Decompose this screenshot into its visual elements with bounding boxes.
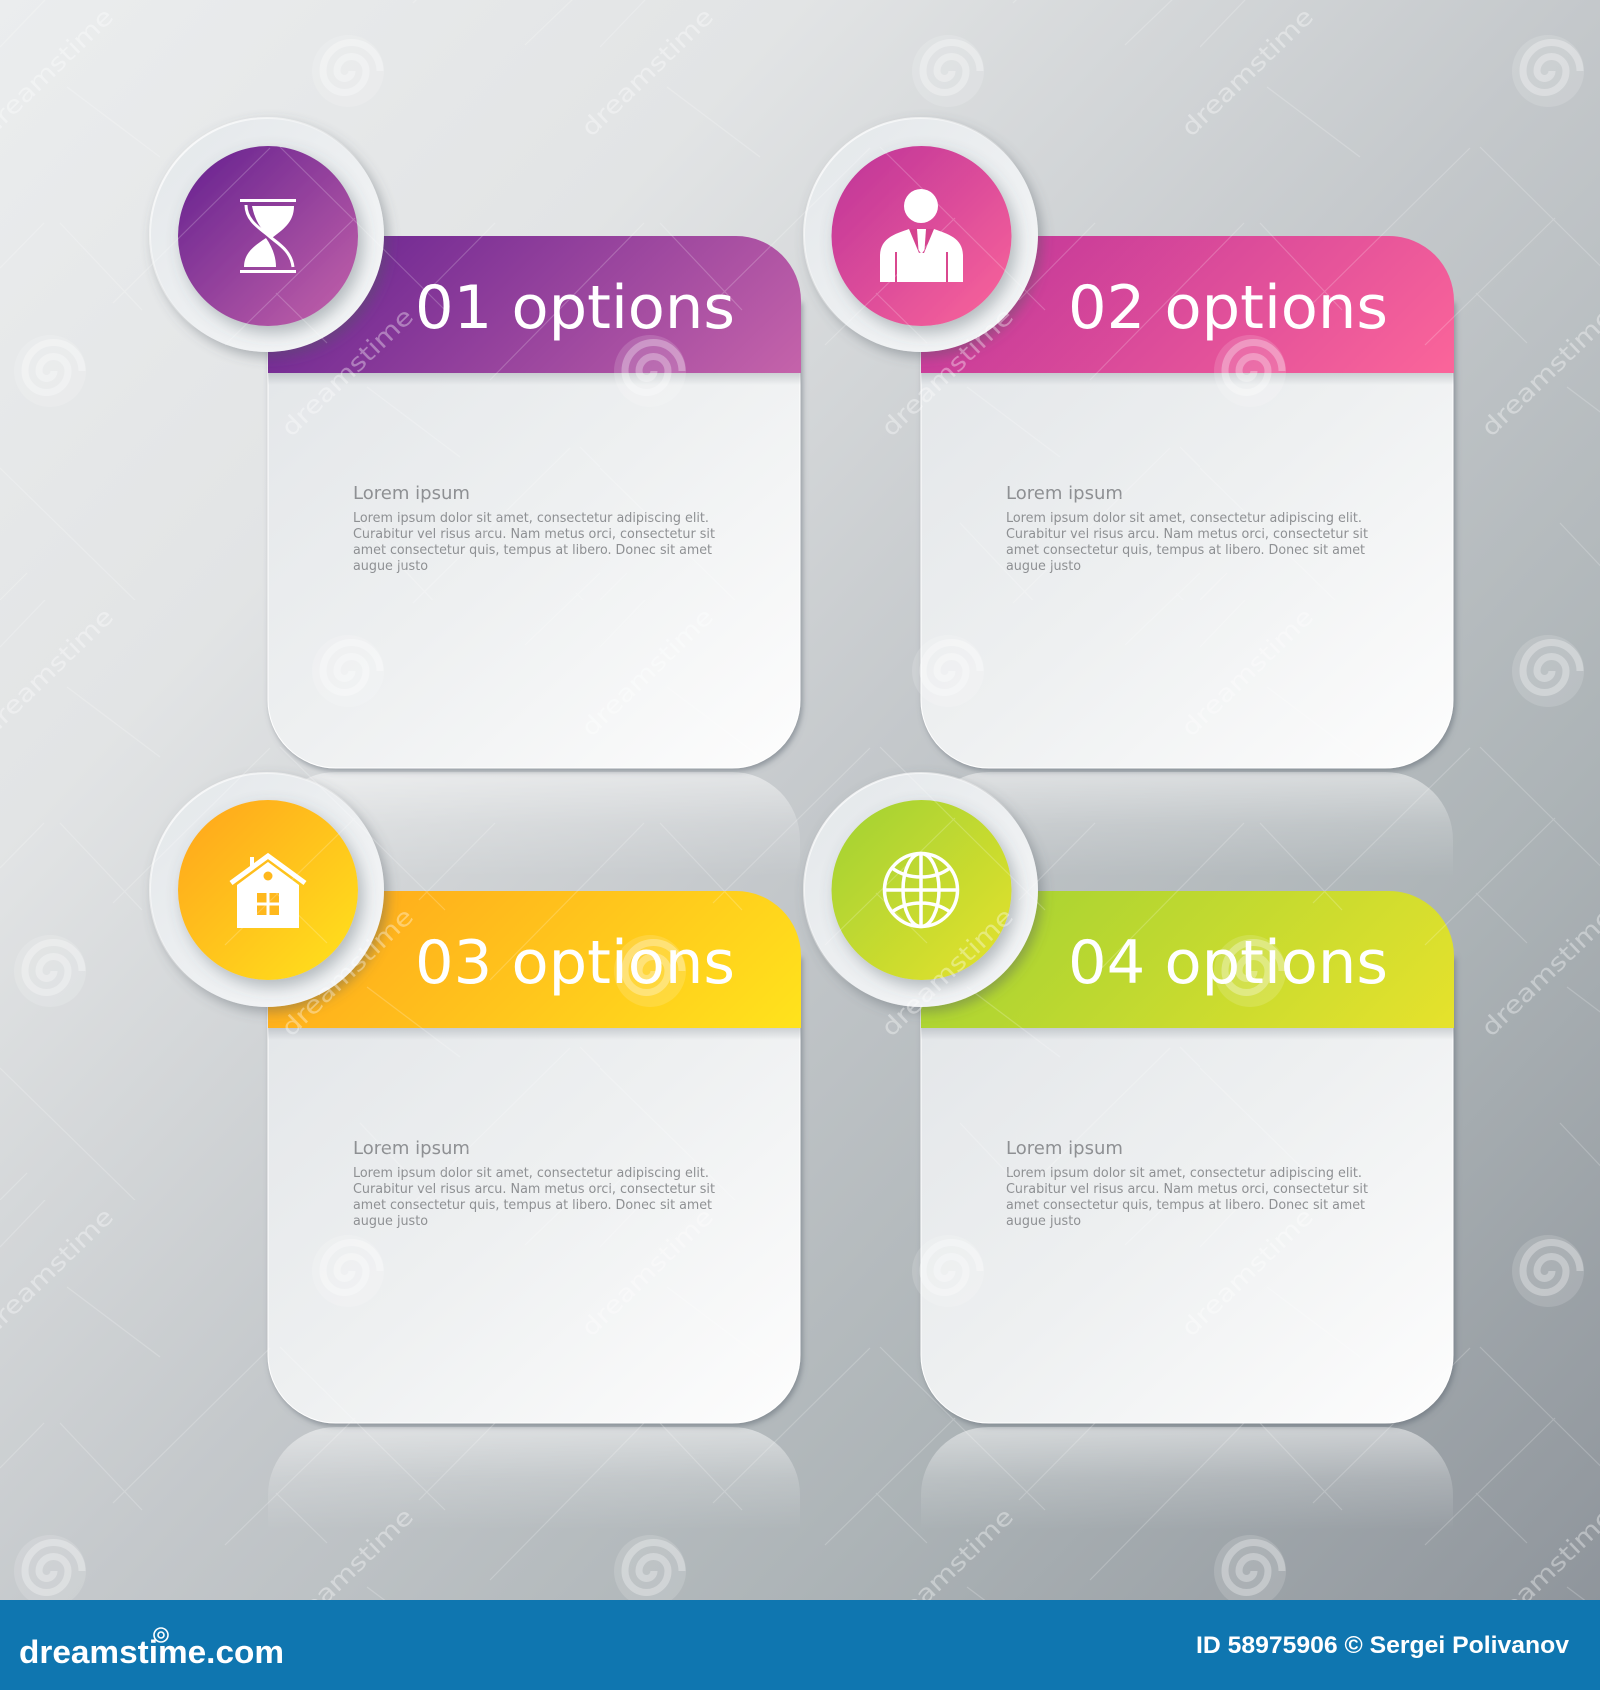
text block: Lorem ipsum dolor sit amet, consectetur adipiscing elit.	[353, 1165, 709, 1181]
reflection: below card 03	[268, 1427, 800, 1530]
footer credit: ID 58975906 © Sergei Polivanov	[1196, 1632, 1570, 1659]
card body	[921, 955, 1453, 1423]
panel: option 02	[804, 118, 1454, 768]
text block	[353, 483, 715, 574]
text block: augue justo	[1006, 558, 1081, 574]
icon: house	[231, 856, 305, 928]
watermark: diagonal wordmarks: dreamstime	[576, 1202, 719, 1342]
reflection: below card 02	[921, 772, 1453, 877]
card body	[268, 300, 800, 768]
footer bar	[0, 1600, 1600, 1690]
badge ring	[804, 118, 1038, 352]
text block: augue justo	[1006, 1213, 1081, 1229]
watermark: diagonal wordmarks: dreamstime	[576, 602, 719, 742]
header band	[268, 891, 801, 1028]
text block: amet consectetur quis, tempus at libero. Donec sit amet	[353, 542, 712, 558]
text block: amet consectetur quis, tempus at libero. Donec sit amet	[353, 1197, 712, 1213]
header band	[921, 891, 1454, 1028]
text block	[1006, 1138, 1368, 1229]
text block: Curabitur vel risus arcu. Nam metus orci, consectetur sit	[1006, 1181, 1368, 1197]
text block: Lorem ipsum	[353, 1138, 470, 1159]
text block: amet consectetur quis, tempus at libero. Donec sit amet	[1006, 1197, 1365, 1213]
icon: business person	[880, 189, 963, 282]
watermark: diagonal wordmarks: dreamstime	[1176, 2, 1319, 142]
watermark: diagonal wordmarks: dreamstime	[1476, 902, 1600, 1042]
watermark: diagonal wordmarks: dreamstime	[876, 902, 1019, 1042]
watermark: diagonal wordmarks: dreamstime	[876, 1502, 1019, 1642]
card body	[268, 955, 800, 1423]
badge disc	[178, 800, 358, 980]
text block: augue justo	[353, 558, 428, 574]
text block: augue justo	[353, 1213, 428, 1229]
text block: Lorem ipsum	[1006, 483, 1123, 504]
badge ring	[804, 773, 1038, 1007]
watermark: diagonal wordmarks: dreamstime	[276, 902, 419, 1042]
heading: 01 options: 01 options	[415, 273, 735, 343]
icon: hourglass	[240, 199, 296, 273]
text block	[1006, 483, 1368, 574]
text block: Lorem ipsum	[1006, 1138, 1123, 1159]
text block: Lorem ipsum	[353, 483, 470, 504]
footer logo: dreamstime.com	[19, 1634, 284, 1670]
text block: Lorem ipsum dolor sit amet, consectetur adipiscing elit.	[1006, 510, 1362, 526]
text block: Curabitur vel risus arcu. Nam metus orci, consectetur sit	[353, 526, 715, 542]
watermark: diagonal wordmarks: dreamstime	[1176, 1202, 1319, 1342]
watermark: diagonal wordmarks: dreamstime	[276, 302, 419, 442]
panel: option 03	[150, 773, 801, 1423]
watermark: diagonal wordmarks: dreamstime	[1476, 302, 1600, 442]
text block	[353, 1138, 715, 1229]
badge disc	[832, 146, 1012, 326]
watermark: diagonal wordmarks: dreamstime	[1476, 1502, 1600, 1642]
text block: Curabitur vel risus arcu. Nam metus orci, consectetur sit	[353, 1181, 715, 1197]
badge disc	[832, 800, 1012, 980]
icon: logo spiral	[154, 1628, 168, 1642]
text block: Curabitur vel risus arcu. Nam metus orci, consectetur sit	[1006, 526, 1368, 542]
badge ring	[150, 118, 384, 352]
text block: amet consectetur quis, tempus at libero. Donec sit amet	[1006, 542, 1365, 558]
heading: 04 options: 04 options	[1068, 928, 1388, 998]
badge ring	[150, 773, 384, 1007]
reflection: below card 04	[921, 1427, 1453, 1530]
heading: 02 options: 02 options	[1068, 273, 1388, 343]
header band	[921, 236, 1454, 373]
panel: option 04	[804, 773, 1454, 1423]
badge disc	[178, 146, 358, 326]
panel: option 01	[150, 118, 801, 768]
card body	[921, 300, 1453, 768]
icon: globe	[884, 853, 958, 927]
text block: Lorem ipsum dolor sit amet, consectetur adipiscing elit.	[353, 510, 709, 526]
watermark: diagonal wordmarks: dreamstime	[276, 1502, 419, 1642]
watermark: diagonal wordmarks: dreamstime	[1176, 602, 1319, 742]
watermark: diagonal wordmarks: dreamstime	[576, 2, 719, 142]
watermark: diagonal wordmarks: dreamstime	[876, 302, 1019, 442]
reflection: below card 01	[268, 772, 800, 877]
heading: 03 options: 03 options	[415, 928, 735, 998]
text block: Lorem ipsum dolor sit amet, consectetur adipiscing elit.	[1006, 1165, 1362, 1181]
header band	[268, 236, 801, 373]
